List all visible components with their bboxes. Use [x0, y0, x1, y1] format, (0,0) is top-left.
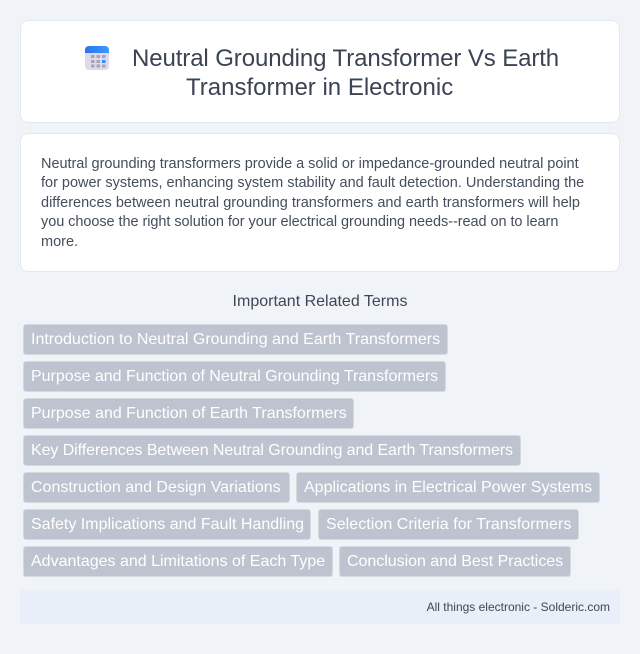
tag: Applications in Electrical Power Systems: [304, 479, 592, 496]
icon: calendar: [85, 46, 109, 70]
section heading: Important Related Terms: [233, 293, 407, 310]
tag: Construction and Design Variations: [31, 479, 281, 496]
title: [132, 45, 559, 101]
tag: Safety Implications and Fault Handling: [31, 516, 304, 533]
tag: [339, 546, 571, 577]
tag: [296, 472, 600, 503]
tag: Selection Criteria for Transformers: [326, 516, 571, 533]
title: Transformer in Electronic: [186, 74, 453, 101]
tag: Introduction to Neutral Grounding and Earth Transformers: [31, 331, 440, 348]
tag: [23, 435, 521, 466]
tag: Purpose and Function of Earth Transformers: [31, 405, 347, 422]
title: Neutral Grounding Transformer Vs Earth: [132, 45, 559, 72]
tag: Advantages and Limitations of Each Type: [31, 553, 325, 570]
tag: Key Differences Between Neutral Grounding and Earth Transformers: [31, 442, 513, 459]
intro text: for power systems, enhancing system stability and fault detection. Understanding the: [41, 175, 584, 191]
footer: [20, 590, 620, 624]
intro text: [41, 156, 584, 250]
intro card: [20, 133, 620, 272]
intro text: differences between neutral grounding transformers and earth transformers will help: [41, 195, 580, 211]
header card: [20, 20, 620, 123]
tag: Conclusion and Best Practices: [347, 553, 563, 570]
tag: [23, 509, 311, 540]
intro text: Neutral grounding transformers provide a solid or impedance-grounded neutral point: [41, 156, 579, 172]
intro text: you choose the right solution for your electrical grounding needs--read on to learn: [41, 214, 558, 230]
intro text: more.: [41, 234, 78, 250]
tag: [23, 398, 354, 429]
tag: [23, 324, 448, 355]
tag: [318, 509, 579, 540]
tag: Purpose and Function of Neutral Grounding Transformers: [31, 368, 438, 385]
tag: [23, 361, 446, 392]
footer: All things electronic - Solderic.com: [427, 600, 610, 614]
tag: [23, 546, 333, 577]
tag: [23, 472, 290, 503]
